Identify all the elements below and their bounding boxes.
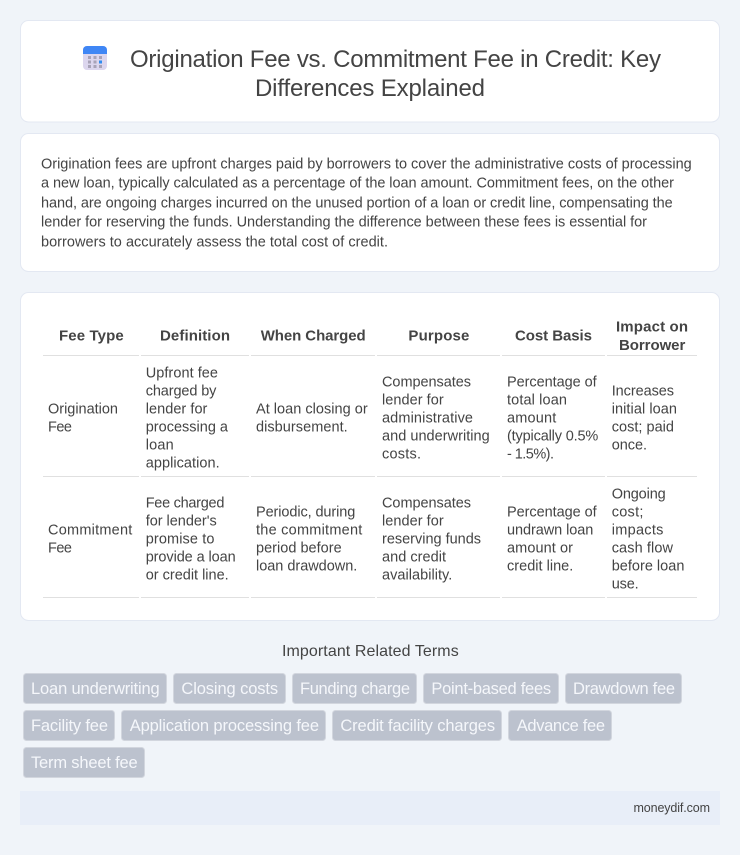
text block: introduction: hand, are ongoing charges incurred on the unused portion of a loan or credit line, compensating the <box>41 195 673 211</box>
tag list: related terms: Application processing fee <box>130 717 319 735</box>
table row: origination fee: lender for <box>146 401 208 417</box>
table row: commitment fee: Commitment <box>48 522 132 538</box>
table header row: Cost Basis <box>515 328 592 345</box>
table row: commitment fee: and credit <box>382 549 446 565</box>
table row: origination fee: charged by <box>146 383 217 399</box>
table row: commitment fee: availability. <box>382 567 452 583</box>
table header row: Fee Type <box>59 328 124 345</box>
table row: commitment fee: Periodic, during <box>256 504 355 520</box>
table row: commitment fee: cost; <box>612 504 643 520</box>
table row: commitment fee: amount or <box>507 540 573 556</box>
tag list: related terms: Drawdown fee <box>573 680 675 698</box>
table row: commitment fee: the commitment <box>256 522 362 538</box>
table header row: Purpose <box>408 328 469 345</box>
table row: origination fee: loan <box>146 437 174 453</box>
text block: introduction: a new loan, typically calculated as a percentage of the loan amount. Commitment fees, on the other <box>41 176 674 192</box>
tag list: related terms: Facility fee <box>31 717 108 735</box>
table row: commitment fee: or credit line. <box>146 567 229 583</box>
text block: introduction: lender for reserving the funds. Understanding the difference between these fees is essential for <box>41 215 647 231</box>
heading: important related terms: Important Related Terms <box>282 643 459 660</box>
text block: introduction: borrowers to accurately assess the total cost of credit. <box>41 234 388 250</box>
footer <box>20 791 720 825</box>
table row: commitment fee: impacts <box>612 522 663 538</box>
table row: origination fee: Compensates <box>382 374 471 390</box>
table row: commitment fee: credit line. <box>507 558 573 574</box>
text block: introduction <box>41 156 692 250</box>
table row: origination fee: - 1.5%). <box>507 446 554 462</box>
table row: origination fee: cost; paid <box>612 419 674 435</box>
table header row: Borrower <box>619 337 685 354</box>
title: Origination Fee vs. Commitment Fee in Credit: Key <box>130 46 661 73</box>
table row: commitment fee: Fee <box>48 540 72 556</box>
table row: commitment fee: Percentage of <box>507 504 598 520</box>
table row: origination fee: administrative <box>382 410 473 426</box>
icon: calendar <box>83 46 107 70</box>
table row: commitment fee: Compensates <box>382 495 471 511</box>
table header row: When Charged <box>261 328 366 345</box>
tag list: related terms: Term sheet fee <box>31 754 138 772</box>
table header row: Impact on <box>616 318 688 335</box>
table header row: Definition <box>160 328 230 345</box>
table row: commitment fee: cash flow <box>612 540 674 556</box>
table row: commitment fee: for lender's <box>146 513 217 529</box>
title <box>130 46 661 102</box>
table row: origination fee: Upfront fee <box>146 365 218 381</box>
table row: origination fee: costs. <box>382 446 421 462</box>
table row: origination fee: disbursement. <box>256 419 348 435</box>
tag list: related terms: Credit facility charges <box>340 717 495 735</box>
table row: commitment fee: Ongoing <box>612 486 666 502</box>
tag list: related terms: Closing costs <box>181 680 278 698</box>
table row: origination fee: Percentage of <box>507 374 598 390</box>
table row: commitment fee: use. <box>612 576 639 592</box>
table row: origination fee: lender for <box>382 392 444 408</box>
table row: origination fee: At loan closing or <box>256 401 368 417</box>
tag list: related terms <box>24 674 682 778</box>
table row: origination fee: (typically 0.5% <box>507 428 598 444</box>
table row: origination fee: processing a <box>146 419 229 435</box>
table row: origination fee: amount <box>507 410 556 426</box>
panel: header <box>20 20 720 122</box>
table row: origination fee: total loan <box>507 392 567 408</box>
title: Differences Explained <box>255 75 485 102</box>
table row: origination fee: application. <box>146 455 220 471</box>
table row: origination fee: Increases <box>612 383 674 399</box>
table row: commitment fee: before loan <box>612 558 684 574</box>
tag list: related terms: Funding charge <box>300 680 410 698</box>
table row: commitment fee: period before <box>256 540 342 556</box>
panel: introduction <box>20 134 720 272</box>
table row: commitment fee: undrawn loan <box>507 522 593 538</box>
table row: commitment fee <box>43 486 697 598</box>
table row: commitment fee: Fee charged <box>146 495 224 511</box>
text block: introduction: Origination fees are upfront charges paid by borrowers to cover the administrative costs of processing <box>41 156 692 172</box>
footer: moneydif.com <box>634 801 710 815</box>
tag list: related terms: Advance fee <box>517 717 605 735</box>
table row: origination fee: Fee <box>48 419 72 435</box>
table row: origination fee: and underwriting <box>382 428 490 444</box>
tag list: related terms: Point-based fees <box>431 680 551 698</box>
table row: commitment fee: lender for <box>382 513 444 529</box>
table row: origination fee <box>43 365 697 477</box>
table row: commitment fee: loan drawdown. <box>256 558 357 574</box>
panel: comparison table <box>20 292 720 620</box>
table row: origination fee: initial loan <box>612 401 677 417</box>
tag list: related terms: Loan underwriting <box>31 680 160 698</box>
table row: origination fee: Origination <box>48 401 118 417</box>
table row: commitment fee: reserving funds <box>382 531 481 547</box>
table header row <box>43 318 697 356</box>
table row: origination fee: once. <box>612 437 647 453</box>
table row: commitment fee: promise to <box>146 531 214 547</box>
table row: commitment fee: provide a loan <box>146 549 236 565</box>
